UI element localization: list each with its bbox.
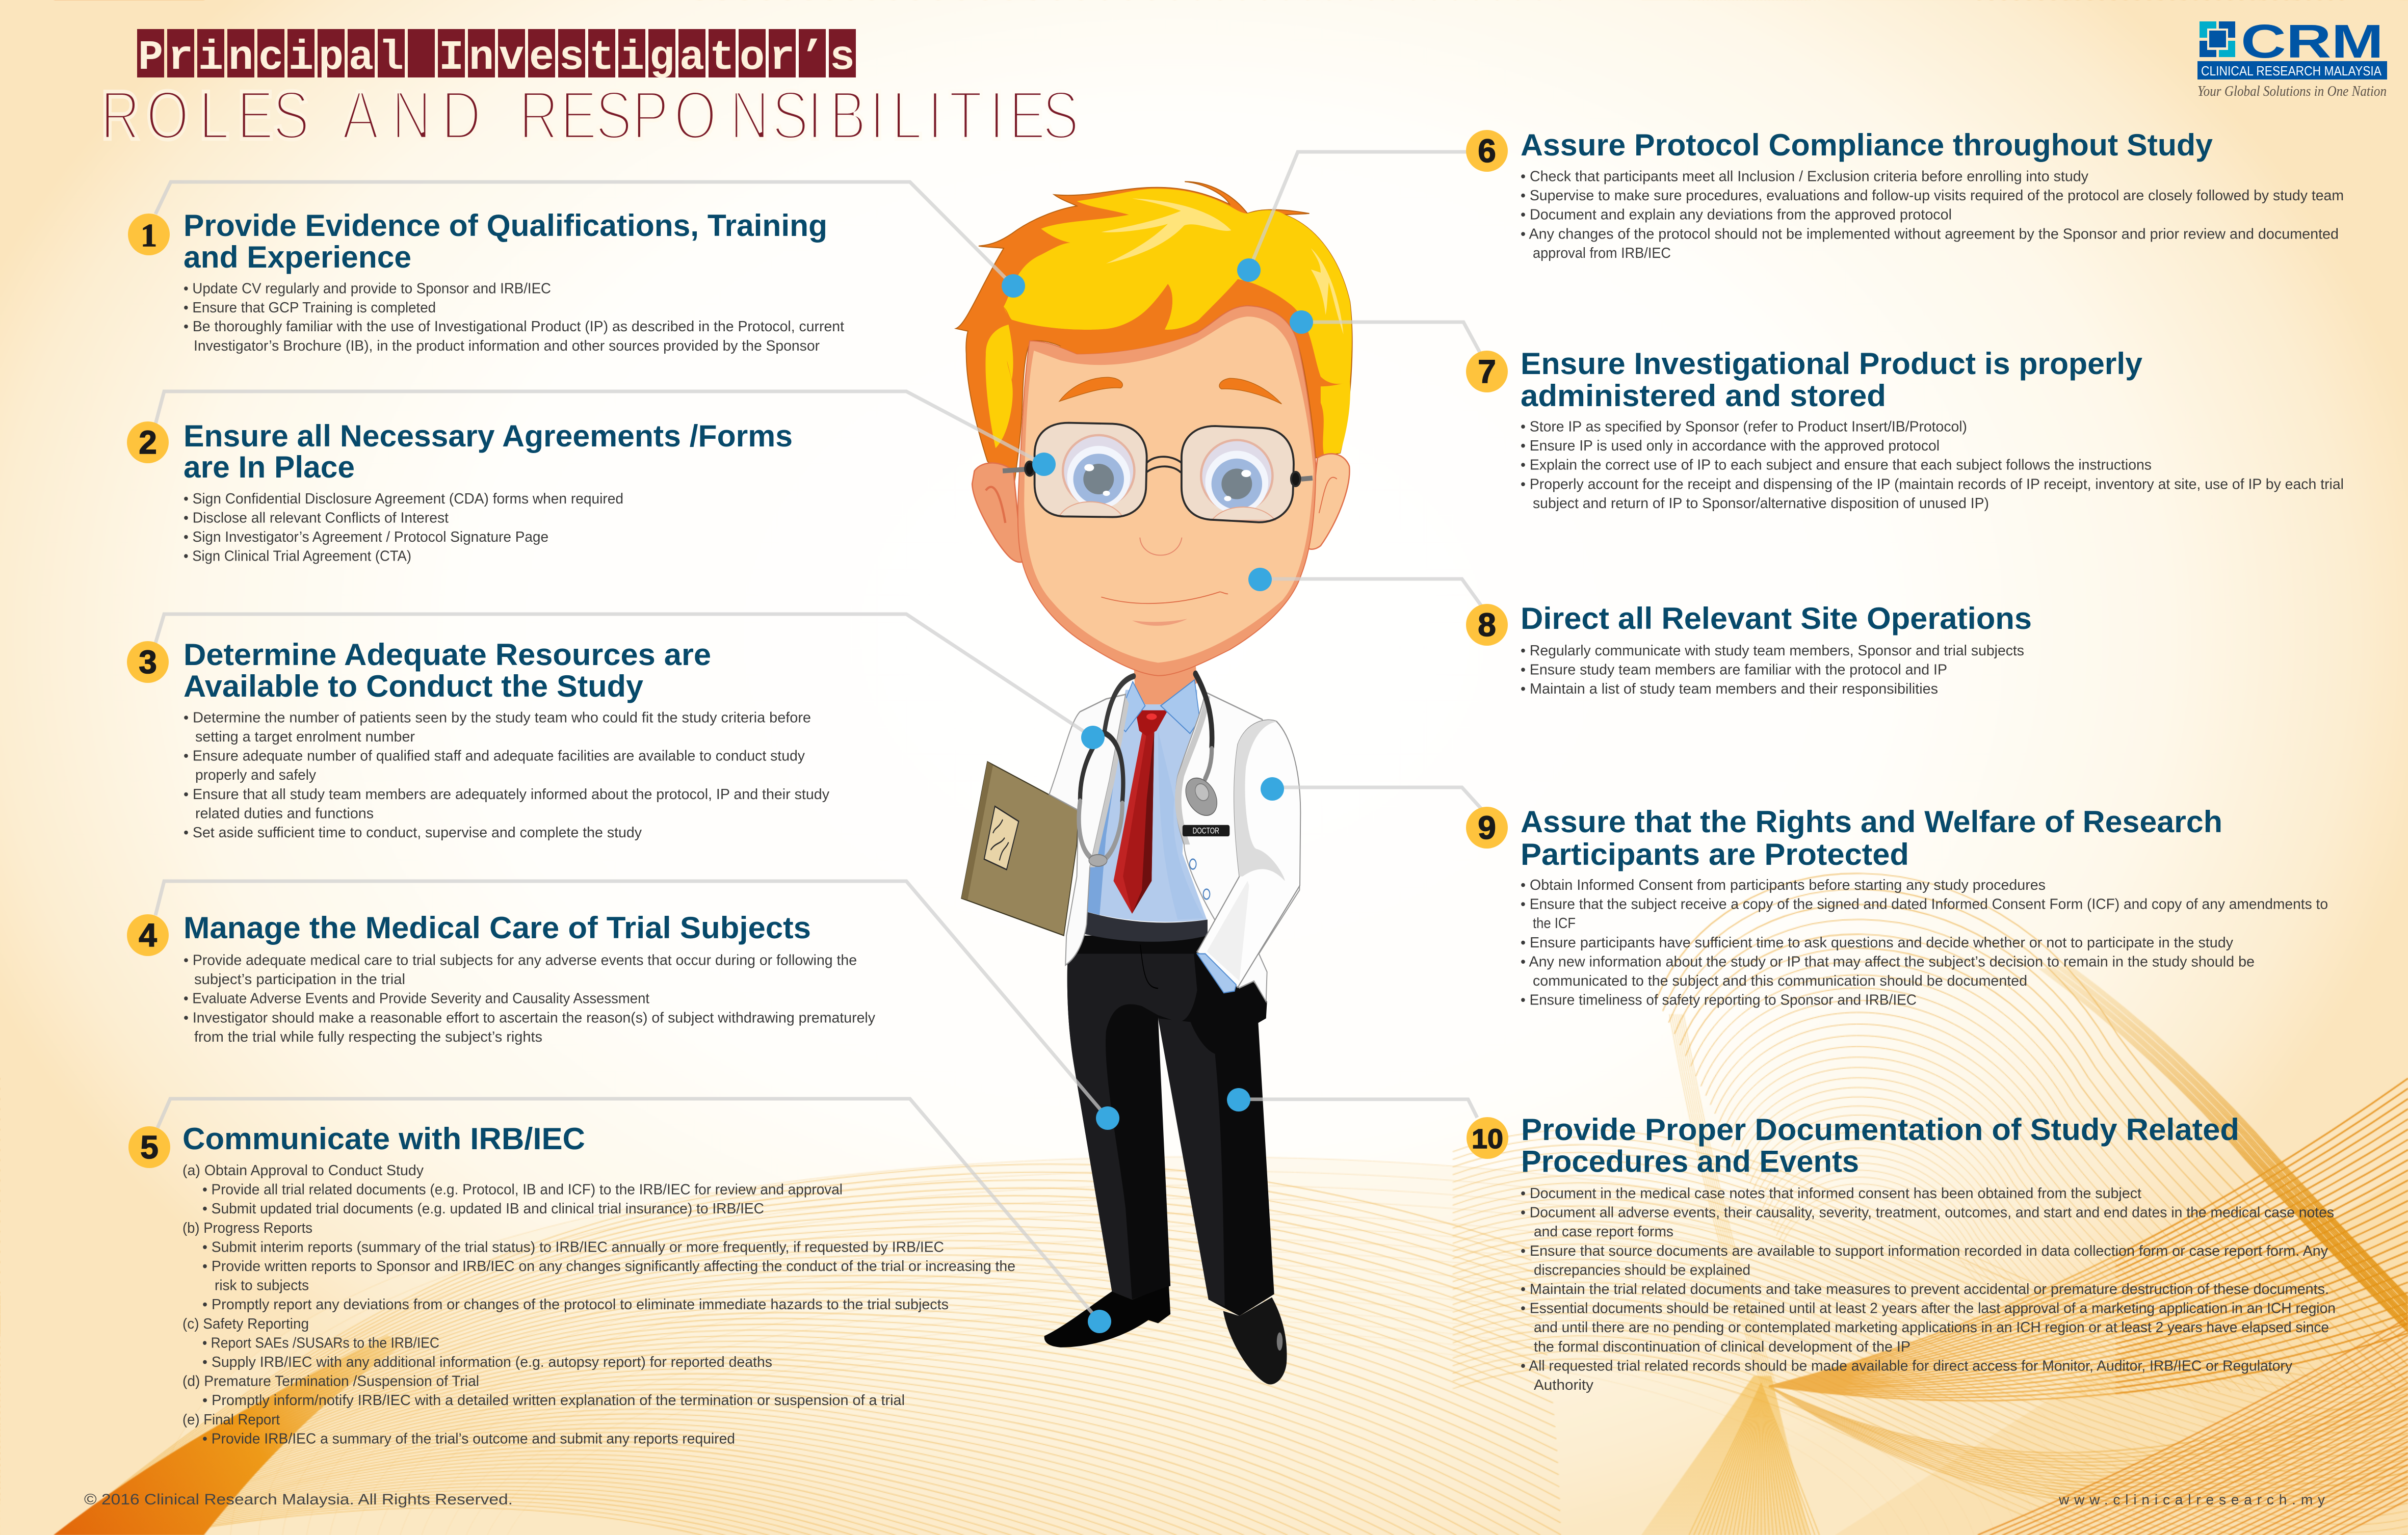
badge 1: 1 xyxy=(141,217,157,253)
face xyxy=(1018,306,1316,676)
body 8: • Maintain a list of study team members and their responsibilities xyxy=(1521,681,1938,697)
glasses lens tint xyxy=(1035,423,1294,522)
neck xyxy=(1134,663,1197,704)
shirt xyxy=(1087,690,1207,922)
heading 9: Assure that the Rights and Welfare of Research xyxy=(1521,805,2222,839)
body 6: • Any changes of the protocol should not be implemented without agreement by the Sponsor and prior review and documented xyxy=(1521,226,2339,242)
badge 1 xyxy=(128,214,170,255)
body 10: • Ensure that source documents are available to support information recorded in data collection form or case report form. Any xyxy=(1521,1243,2328,1259)
body 5: (d) Premature Termination /Suspension of Trial xyxy=(182,1373,479,1390)
body 7: • Explain the correct use of IP to each subject and ensure that each subject follows the instructions xyxy=(1521,457,2152,473)
body 6: • Document and explain any deviations from the approved protocol xyxy=(1521,207,1952,223)
body 4: • Evaluate Adverse Events and Provide Severity and Causality Assessment xyxy=(184,991,649,1007)
body 9: communicated to the subject and this communication should be documented xyxy=(1533,973,2027,989)
name tag xyxy=(1183,825,1229,836)
body 3: related duties and functions xyxy=(195,805,374,822)
body 7: • Ensure IP is used only in accordance with the approved protocol xyxy=(1521,438,1940,454)
body 10 xyxy=(1521,1185,2336,1393)
body 5: • Provide IRB/IEC a summary of the trial’s outcome and submit any reports required xyxy=(202,1431,735,1447)
logo icon xyxy=(2200,21,2235,57)
body 4: from the trial while fully respecting the subject’s rights xyxy=(194,1029,542,1045)
body 1 xyxy=(184,281,844,354)
heading 10: Provide Proper Documentation of Study Related xyxy=(1521,1113,2239,1147)
body 7: • Properly account for the receipt and dispensing of the IP (maintain records of IP receipt, inventory at site, use of IP by each trial xyxy=(1521,476,2344,492)
body 3: properly and safely xyxy=(195,767,316,783)
lab coat left xyxy=(1049,695,1129,965)
body 10: • Maintain the trial related documents and take measures to prevent accidental or premature destruction of these documents. xyxy=(1521,1281,2329,1298)
panel 7: investigational product xyxy=(1466,347,2344,512)
body 10: and until there are no pending or contemplated marketing applications in an ICH region or at least 2 years have elapsed since xyxy=(1534,1319,2329,1336)
panel 2: agreements xyxy=(127,419,793,565)
body 7 xyxy=(1521,419,2344,512)
panel 10: documentation xyxy=(1467,1113,2336,1393)
hair xyxy=(956,181,1352,490)
badge 10 xyxy=(1467,1117,1508,1159)
heading 8: Direct all Relevant Site Operations xyxy=(1521,601,2032,636)
body 1: • Ensure that GCP Training is completed xyxy=(184,300,436,316)
body 10: • Document in the medical case notes that informed consent has been obtained from the subject xyxy=(1521,1185,2141,1202)
body 6 xyxy=(1521,168,2344,261)
logo wordmark: CRM xyxy=(2241,15,2384,68)
panel 9: participant rights xyxy=(1466,805,2328,1009)
footer copyright: © 2016 Clinical Research Malaysia. All Rights Reserved. xyxy=(84,1491,513,1508)
badge 6: 6 xyxy=(1478,133,1496,169)
footer website: www.clinicalresearch.my xyxy=(2058,1492,2325,1507)
character body xyxy=(961,663,1300,1384)
heading 2: Ensure all Necessary Agreements /Forms xyxy=(184,419,793,453)
nose xyxy=(1140,538,1182,555)
body 9: • Ensure that the subject receive a copy of the signed and dated Informed Consent Form (ICF) and copy of any amendments to xyxy=(1521,896,2328,913)
body 10: discrepancies should be explained xyxy=(1534,1262,1750,1278)
body 2: • Sign Investigator’s Agreement / Protocol Signature Page xyxy=(184,529,548,545)
heading 7: Ensure Investigational Product is properly xyxy=(1521,347,2143,381)
body 10: • Essential documents should be retained until at least 2 years after the last approval of a marketing application in an ICH region xyxy=(1521,1301,2336,1317)
body 7: subject and return of IP to Sponsor/alternative disposition of unused IP) xyxy=(1533,495,1989,512)
body 5: • Supply IRB/IEC with any additional information (e.g. autopsy report) for reported deaths xyxy=(202,1354,772,1370)
body 1: Investigator’s Brochure (IB), in the product information and other sources provided by the Sponsor xyxy=(194,338,820,354)
body 6: • Supervise to make sure procedures, evaluations and follow-up visits required of the protocol are closely followed by study team xyxy=(1521,188,2344,204)
body 4: subject’s participation in the trial xyxy=(194,971,405,988)
heading 9 xyxy=(1521,805,2222,871)
badge 6 xyxy=(1466,130,1508,172)
badge 10: 10 xyxy=(1472,1124,1503,1154)
trousers xyxy=(1067,936,1274,1316)
badge 8 xyxy=(1466,604,1508,646)
eyebrows xyxy=(1059,377,1281,404)
panel 5: IRB/IEC communication xyxy=(128,1122,1015,1447)
shoes xyxy=(1044,1286,1287,1384)
body 1: • Update CV regularly and provide to Sponsor and IRB/IEC xyxy=(184,281,551,297)
hair fringe xyxy=(1004,284,1201,354)
heading 2 xyxy=(184,419,793,484)
panel 1: qualifications xyxy=(128,208,844,354)
body 5: • Provide all trial related documents (e.g. Protocol, IB and ICF) to the IRB/IEC for review and approval xyxy=(202,1182,843,1198)
shirt collar xyxy=(1116,680,1200,733)
body 5: • Report SAEs /SUSARs to the IRB/IEC xyxy=(202,1335,439,1351)
body 7: • Store IP as specified by Sponsor (refer to Product Insert/IB/Protocol) xyxy=(1521,419,1967,435)
body 4: • Provide adequate medical care to trial subjects for any adverse events that occur during or following the xyxy=(184,952,857,968)
badge 3 xyxy=(127,641,169,683)
body 2: • Sign Clinical Trial Agreement (CTA) xyxy=(184,548,411,565)
badge 4 xyxy=(127,914,169,956)
body 3: setting a target enrolment number xyxy=(195,729,415,745)
badge 9 xyxy=(1466,807,1508,849)
badge 3: 3 xyxy=(139,644,157,680)
body 5: (c) Safety Reporting xyxy=(182,1316,309,1332)
stethoscope xyxy=(1079,674,1222,866)
name tag: DOCTOR xyxy=(1193,827,1219,836)
body 5: • Provide written reports to Sponsor and IRB/IEC on any changes significantly affecting the conduct of the trial or increasing the xyxy=(202,1258,1015,1275)
badge 5: 5 xyxy=(140,1129,159,1166)
belt xyxy=(1083,912,1208,942)
body 2: • Sign Confidential Disclosure Agreement (CDA) forms when required xyxy=(184,491,623,507)
body 6: • Check that participants meet all Inclusion / Exclusion criteria before enrolling into study xyxy=(1521,168,2088,184)
badge 2: 2 xyxy=(139,424,157,461)
heading 10 xyxy=(1521,1113,2239,1178)
body 10: • All requested trial related records should be made available for direct access for Monitor, Auditor, IRB/IEC or Regulatory xyxy=(1521,1358,2292,1374)
body 10: Authority xyxy=(1534,1377,1594,1393)
badge 9: 9 xyxy=(1478,809,1496,846)
mouth xyxy=(1101,592,1228,626)
clipboard folder xyxy=(961,762,1079,936)
logo bar: CLINICAL RESEARCH MALAYSIA xyxy=(2201,63,2382,78)
body 5: • Submit updated trial documents (e.g. updated IB and clinical trial insurance) to IRB/IEC xyxy=(202,1201,764,1217)
badge 5 xyxy=(128,1126,170,1168)
coat sleeve xyxy=(1197,720,1300,988)
heading 1 xyxy=(184,208,827,274)
body 9 xyxy=(1521,877,2328,1009)
body 3: • Determine the number of patients seen by the study team who could fit the study criteria before xyxy=(184,709,811,726)
connector lines xyxy=(155,134,1482,1321)
ears xyxy=(972,454,1349,562)
body 10: and case report forms xyxy=(1534,1224,1673,1240)
heading 1: and Experience xyxy=(184,240,411,274)
heading 7 xyxy=(1521,347,2143,413)
logo: Clinical Research Malaysia xyxy=(2197,15,2387,99)
heading 3: Available to Conduct the Study xyxy=(184,669,644,703)
heading 3 xyxy=(184,638,711,703)
badge 7 xyxy=(1466,351,1508,392)
heading 4: Manage the Medical Care of Trial Subjects xyxy=(184,911,811,945)
lab coat right xyxy=(1175,692,1299,1001)
coat buttons xyxy=(1190,859,1210,899)
heading 9: Participants are Protected xyxy=(1521,837,1909,871)
body 9: • Any new information about the study or IP that may affect the subject’s decision to remain in the study should be xyxy=(1521,954,2255,970)
body 9: • Ensure participants have sufficient time to ask questions and decide whether or not to participate in the study xyxy=(1521,935,2233,951)
body 4 xyxy=(184,952,875,1045)
panel 3: resources xyxy=(127,638,829,841)
badge 2 xyxy=(127,421,169,463)
body 5: (b) Progress Reports xyxy=(182,1220,312,1236)
logo tagline: Your Global Solutions in One Nation xyxy=(2197,84,2387,99)
heading 7: administered and stored xyxy=(1521,379,1886,413)
title xyxy=(100,29,1079,153)
body 9: • Ensure timeliness of safety reporting to Sponsor and IRB/IEC xyxy=(1521,992,1917,1009)
heading 10: Procedures and Events xyxy=(1521,1145,1859,1178)
body 9: • Obtain Informed Consent from participants before starting any study procedures xyxy=(1521,877,2046,893)
body 2 xyxy=(184,491,623,565)
body 4: • Investigator should make a reasonable effort to ascertain the reason(s) of subject withdrawing prematurely xyxy=(184,1010,875,1026)
body 5: • Submit interim reports (summary of the trial status) to IRB/IEC annually or more frequently, if requested by IRB/IEC xyxy=(202,1239,944,1255)
body 2: • Disclose all relevant Conflicts of Interest xyxy=(184,510,449,526)
shirt cuff xyxy=(1197,954,1236,993)
panel 6: protocol compliance xyxy=(1466,128,2344,261)
body 3: • Ensure adequate number of qualified staff and adequate facilities are available to conduct study xyxy=(184,748,805,764)
heading 2: are In Place xyxy=(184,450,355,484)
body 10: the formal discontinuation of clinical development of the IP xyxy=(1534,1339,1910,1355)
body 5 xyxy=(182,1162,1015,1447)
panel 4: medical care xyxy=(127,911,875,1045)
body 3: • Ensure that all study team members are adequately informed about the protocol, IP and their study xyxy=(184,786,829,803)
body 5: risk to subjects xyxy=(215,1278,309,1294)
necktie xyxy=(1114,710,1168,914)
badge 4: 4 xyxy=(139,917,157,954)
body 10: • Document all adverse events, their causality, severity, treatment, outcomes, and start and end dates in the medical case notes xyxy=(1521,1205,2334,1221)
body 8 xyxy=(1521,643,2024,697)
body 5: (e) Final Report xyxy=(182,1412,280,1428)
body 5: (a) Obtain Approval to Conduct Study xyxy=(182,1162,424,1179)
body 3 xyxy=(184,709,829,841)
doctor character xyxy=(956,181,1352,1384)
body 6: approval from IRB/IEC xyxy=(1533,245,1671,261)
body 5: • Promptly inform/notify IRB/IEC with a detailed written explanation of the termination or suspension of a trial xyxy=(202,1392,905,1409)
badge 7: 7 xyxy=(1478,353,1496,390)
heading 5: Communicate with IRB/IEC xyxy=(182,1122,585,1156)
character head xyxy=(956,181,1352,676)
body 1: • Be thoroughly familiar with the use of Investigational Product (IP) as described in the Protocol, current xyxy=(184,319,844,335)
glasses frame xyxy=(1003,423,1313,522)
pointer dots xyxy=(1002,258,1313,1333)
body 5: • Promptly report any deviations from or changes of the protocol to eliminate immediate hazards to the trial subjects xyxy=(202,1296,949,1313)
badge 8: 8 xyxy=(1478,606,1496,643)
title line: ROLES AND RESPONSIBILITIES: ROLES AND RESPONSIBILITIES xyxy=(100,76,1079,153)
title banner: Principal Investigator's: Principal Investigator’s xyxy=(138,34,855,82)
body 8: • Ensure study team members are familiar with the protocol and IP xyxy=(1521,662,1947,678)
panel 8: site operations xyxy=(1466,601,2032,697)
body 3: • Set aside sufficient time to conduct, supervise and complete the study xyxy=(184,825,642,841)
heading 1: Provide Evidence of Qualifications, Training xyxy=(184,208,827,243)
body 8: • Regularly communicate with study team members, Sponsor and trial subjects xyxy=(1521,643,2024,659)
body 9: the ICF xyxy=(1533,915,1576,932)
heading 3: Determine Adequate Resources are xyxy=(184,638,711,672)
heading 6: Assure Protocol Compliance throughout Study xyxy=(1521,128,2213,162)
eyes xyxy=(1059,435,1275,520)
